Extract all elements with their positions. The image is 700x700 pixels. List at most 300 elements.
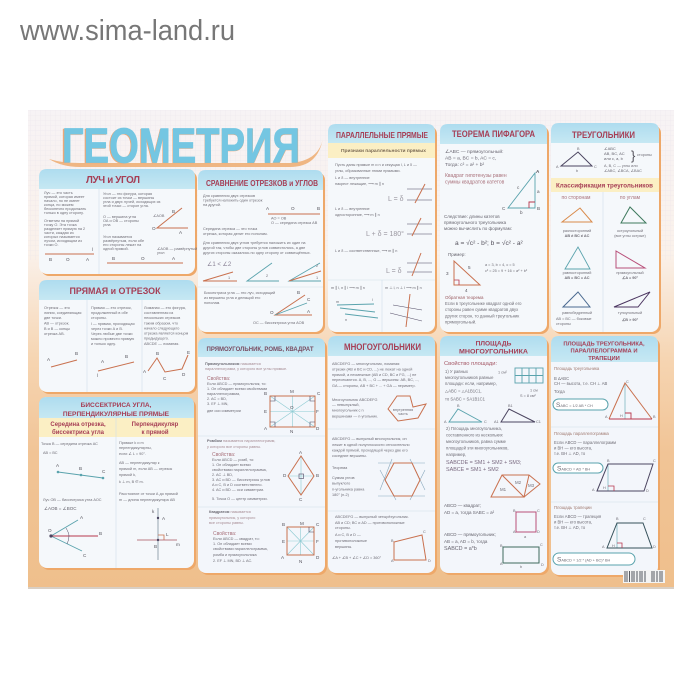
- diagram: straight angle: B: [112, 256, 115, 261]
- text: ray: [44, 191, 86, 247]
- diagrams: parallels: n: [345, 318, 347, 322]
- text: triangle area: В ∆ABC: [554, 376, 569, 381]
- diagrams: segment, line, polyline: B: [75, 351, 78, 356]
- text: bisector: [204, 291, 305, 325]
- diagrams: square and rectangle: D: [537, 530, 540, 534]
- text: example values: c² = 25 = 9 + 16 = a² + b²: [485, 269, 528, 273]
- text: perpendicular: если ∠ L = 90°.: [119, 452, 146, 456]
- text: square: 2. EF ⊥ MN, BD ⊥ AC.: [213, 559, 252, 563]
- text: segments: других стороны оказались по одну сторону от совмещённых.: [203, 251, 311, 255]
- text: segments: Середина отрезка — это точка: [203, 227, 258, 231]
- diagram: rectangle: M: [290, 389, 294, 394]
- heading: БИССЕКТРИСА УГЛА,: [81, 402, 152, 409]
- panel: line and segment: [39, 280, 197, 394]
- diagram: parallelogram: D: [646, 489, 649, 493]
- text: theorem: суммы квадратов катетов: [445, 180, 505, 186]
- text: example values: a = 3, b = 4, c = 5: [485, 263, 515, 267]
- diagram: segment AB: A: [266, 206, 270, 211]
- diagram: segment AB: B: [317, 206, 320, 211]
- text: ray: Отметим на прямой: [44, 219, 79, 223]
- text: columns: ABCDE — ломаная.: [144, 342, 179, 346]
- diagram: midpoint: [56, 463, 106, 479]
- panel: polygons: [328, 336, 437, 575]
- diagram: bisector: [270, 290, 312, 315]
- text: angle: О — вершина угла: [103, 215, 137, 219]
- text: triangle type labels: равнобедренный: [562, 311, 592, 315]
- diagram: perpendicular: k: [152, 509, 155, 514]
- text: midpoint: ∠AOB = ∠BOC: [44, 506, 77, 511]
- diagram: right triangle: b: [520, 210, 523, 215]
- text: rhombus: Ромбом называется параллелограмм,: [207, 439, 275, 443]
- text: notation: или c, a, b: [604, 156, 624, 161]
- diagram: trapezoid: A: [602, 545, 605, 549]
- diagrams: segment, line, polyline: D: [182, 372, 186, 377]
- text: square: [209, 510, 268, 563]
- text: triangle area: Тогда: [554, 389, 565, 394]
- diagram: hexagon: [378, 459, 425, 500]
- formula pill: trapezoid: SABCD = 1/2 * (AD + BC)* BH: [557, 556, 611, 564]
- title: ГЕОМЕТРИЯ: [62, 120, 300, 174]
- text: midpoint: Луч ОВ — биссектриса угла АОС: [43, 498, 102, 502]
- diagram: perpendicular: [137, 508, 180, 560]
- text: ray: Луч — это часть: [44, 191, 73, 195]
- diagram: bisector: C: [307, 297, 311, 302]
- diagrams: segment, line, polyline: E: [187, 350, 190, 355]
- diagrams: segment, line, polyline: [47, 350, 190, 381]
- text: definition: отрезки (AB и BC и CD, ...) не лежат на одной: [332, 368, 412, 372]
- text: square: свойствами параллелограмма,: [213, 547, 268, 551]
- diagram: quadrilateral: D: [428, 559, 431, 563]
- diagram: triangle height: [605, 380, 656, 419]
- text: segments: AO = OB: [271, 216, 287, 220]
- subheading: Признаки параллельности прямых: [341, 148, 426, 154]
- text: convex polygon: ABCDEFG — выпуклый многоугольник, он: [332, 437, 407, 441]
- heading: ПАРАЛЛЕЛОГРАММА И: [570, 348, 638, 354]
- text: convex polygon: Теорема: [332, 466, 348, 470]
- diagram: right triangle: C: [502, 206, 506, 211]
- diagram: bisector of angle: [48, 515, 102, 558]
- diagram: equal triangles: A: [444, 420, 447, 424]
- text: angle: одной прямой.: [103, 247, 129, 251]
- text: columns: предыдущего.: [144, 336, 169, 340]
- diagram: right triangle: a: [537, 189, 540, 194]
- heading: ПАРАЛЛЕЛЬНЫЕ ПРЯМЫЕ: [336, 130, 428, 140]
- heading: ЛУЧ и УГОЛ: [86, 175, 140, 186]
- text: triangle type labels: ∠B > 90°: [622, 317, 639, 322]
- diagram: example triangle: 5: [468, 265, 471, 270]
- diagram: angles: 2: [266, 274, 268, 278]
- diagram: angles: 1: [228, 276, 230, 280]
- text: ray: начало, но не имеет: [44, 199, 80, 203]
- text: notation: A, B, C — углы или: [604, 164, 638, 168]
- text: definition: — невыпуклый,: [332, 403, 360, 407]
- diagram: example triangle: [446, 261, 480, 293]
- diagram: bisector: O: [270, 310, 274, 315]
- text: segments: Для сравнения двух отрезков: [203, 194, 255, 198]
- text: square: Если ABCD — квадрат, то:: [213, 537, 260, 541]
- diagrams: square and rectangle: C: [540, 543, 543, 547]
- text: ray: бесконечно продолжать: [44, 207, 86, 211]
- text: definition: вершинами — n-угольник.: [332, 414, 378, 418]
- text: columns: стороны.: [91, 316, 107, 320]
- text: angle: Угол — это фигура, которая: [103, 192, 152, 196]
- text: columns: АВ — отрезок.: [44, 322, 69, 326]
- text: columns: [44, 306, 189, 346]
- panel: rectangle, rhombus, square: [198, 338, 327, 575]
- diagram: square: N: [299, 559, 302, 564]
- text: perpendicular: прямой m, если АВ — отрезок: [119, 467, 172, 471]
- diagrams: square and rectangle: D: [541, 563, 544, 567]
- subheadings: по углам: [620, 195, 641, 201]
- text: square: Квадратом называется: [209, 510, 251, 514]
- text: notation: [604, 146, 652, 173]
- formulas: [366, 196, 404, 275]
- panel: Pythagoras: [440, 124, 549, 334]
- diagram: straight angle: A: [172, 256, 176, 261]
- subheadings: Середина отрезка,: [50, 422, 106, 428]
- text: trapezoid area: т.е. BH ⊥ AD, то: [554, 525, 586, 530]
- text: segments: Для сравнения двух углов требуется наложить их один на: [203, 241, 306, 245]
- text: parallelogram area: и BH — его высота,: [554, 446, 592, 450]
- subheadings: [562, 195, 641, 201]
- text: triangle area: [554, 366, 608, 394]
- diagram: composite polygon: M2: [515, 480, 522, 485]
- text: corollary: прямоугольного треугольника: [444, 220, 507, 225]
- diagram: trapezoid: B: [616, 517, 619, 521]
- text: angle: Угол называется: [103, 235, 132, 239]
- diagram: trapezoid: H: [612, 544, 615, 548]
- diagram: equal triangles: B: [457, 404, 460, 408]
- heading: ТРЕУГОЛЬНИКИ: [572, 130, 635, 140]
- diagram: example triangle: 3: [446, 271, 449, 276]
- diagram: parallelogram: B: [607, 459, 610, 463]
- diagram: triangle height: C: [626, 380, 629, 384]
- diagram: unit grid: 1 см²: [498, 370, 508, 374]
- text: ray: которых называется: [44, 235, 80, 239]
- text: convex polygon: Сумма углов: [332, 476, 355, 480]
- text: rule two: 2) Площадь многоугольника,: [446, 426, 502, 431]
- subheadings: по сторонам: [562, 195, 591, 201]
- text: converse theorem: стороны равен сумме квадратов двух: [445, 307, 519, 312]
- diagram: quadrilateral: B: [391, 539, 394, 543]
- text: convex polygon: лежит в одной полуплоскости относительно: [332, 443, 410, 447]
- text: rule two: [446, 426, 522, 473]
- text: quadrilateral: ∠A + ∠B + ∠C + ∠D = 360°: [332, 556, 382, 560]
- text: corollary: можно вычислить по формулам:: [444, 226, 512, 231]
- text: convex polygon: выпуклого: [332, 482, 350, 486]
- text: square and rectangle area: AD = a, тогда SABC = a²: [444, 510, 495, 515]
- diagram: trapezoid: D: [653, 545, 656, 549]
- text: definition: ABCDEFG — многоугольник, ломаная:: [332, 362, 400, 366]
- diagram: bisector of angle: O: [48, 528, 52, 533]
- diagram: right triangle: A: [536, 169, 540, 174]
- text: definition: [332, 362, 419, 418]
- text: triangle area: CH — высота, т.е. CH ⊥ AB: [554, 381, 608, 386]
- text: triangle type labels: AB = BC — боковые: [556, 317, 592, 321]
- heading: ПЕРПЕНДИКУЛЯРНЫЕ ПРЯМЫЕ: [63, 411, 170, 418]
- text: corollary: Следствие: длины катетов: [444, 214, 500, 219]
- text: triangle type labels: ∠A = 90°: [622, 275, 639, 280]
- text: rectangle: 2. AC = BD,: [207, 397, 227, 401]
- text: example values: [485, 263, 528, 273]
- heading: СРАВНЕНИЕ ОТРЕЗКОВ и УГЛОВ: [206, 178, 318, 188]
- text: example: Пример:: [448, 252, 466, 257]
- diagram: line with point: A: [86, 257, 90, 262]
- text: rhombus: Свойства:: [212, 451, 235, 458]
- text: midpoint: АВ = ВС: [43, 451, 58, 455]
- diagram: rectangle: A: [264, 426, 268, 431]
- diagram: line with point: O: [66, 257, 70, 262]
- diagram: parallelogram: C: [653, 459, 656, 463]
- diagram: quadrilateral: C: [423, 530, 426, 534]
- panel: polygon area: [440, 336, 549, 575]
- text: square and rectangle area: AB = a, AD = b, тогда: [444, 539, 488, 544]
- formula pill: triangle: SABC = 1/2 AB * CH: [556, 402, 593, 409]
- text: bisector: Биссектриса угла — это луч, исходящий: [204, 291, 275, 295]
- text: triangle type labels: [556, 229, 646, 326]
- diagram: angle AOB: ∠AOB: [153, 214, 165, 218]
- text: rule one: [445, 369, 497, 402]
- diagram: equal triangles: [444, 404, 541, 424]
- diagram: angles: [203, 263, 321, 281]
- text: rhombus: A и C, B и D соответственно.: [212, 483, 263, 487]
- text: theorems: [331, 285, 422, 290]
- diagram: concave polygon: [388, 396, 426, 421]
- panel: ray and angle: [39, 169, 197, 276]
- title: ГЕОМЕТРИЯ: [60, 120, 300, 174]
- text: rule two: SABCE = SM1 + SM2: [446, 467, 499, 473]
- text: rhombus: 5. Точка O — центр симметрии.: [212, 497, 268, 501]
- text: rectangle: параллелограмма,: [207, 392, 240, 396]
- formula pill: parallelogram: SABCD = AD * BH: [557, 466, 590, 472]
- diagrams: parallels: m: [336, 300, 339, 304]
- text: columns: продолженный в обе: [91, 311, 128, 315]
- diagram: rectangle: E: [264, 409, 267, 414]
- diagram: rectangle: F: [316, 409, 319, 414]
- diagram: perpendicular: L: [166, 532, 169, 537]
- text: square and rectangle area: SABCD = a*b: [444, 546, 477, 552]
- text: convex polygon: каждой прямой, проходящей через две его: [332, 448, 408, 452]
- text: rule one: многоугольников равные: [445, 375, 494, 380]
- diagram: bisector: A: [307, 309, 311, 314]
- text: angle: этой точки — сторон угла.: [103, 204, 149, 208]
- text: segments: O — середина отрезка AB: [271, 221, 318, 225]
- diagram: equal triangles: B1: [508, 404, 513, 408]
- text: square and rectangle area: ABCD — квадрат;: [444, 503, 481, 508]
- diagram: trapezoid: C: [643, 517, 646, 521]
- text: converse theorem: других сторон, то данный треугольник: [445, 314, 519, 318]
- heading: ПРЯМАЯ и ОТРЕЗОК: [70, 285, 161, 296]
- text: columns: составленная из: [144, 311, 174, 315]
- text: columns: нескольких отрезков: [144, 316, 180, 320]
- text: rectangle: 3. EF ⊥ MN,: [207, 402, 228, 406]
- panel: parallel lines: [328, 124, 437, 334]
- text: perpendicular: m — длина перпендикуляра АВ: [119, 498, 175, 502]
- text: quadrilateral: A и C, B и D —: [335, 533, 361, 537]
- diagram: angle AOB: A: [179, 230, 183, 235]
- text: perpendicular: k ⊥ m, B ∈ m.: [119, 480, 144, 484]
- text: angle: ОА и ОВ — стороны: [103, 219, 139, 223]
- text: segments: другой так, чтобы две стороны углов совместились, а две: [203, 246, 305, 250]
- diagram: unit grid: [498, 368, 543, 398]
- diagram: angle AOB: [152, 208, 188, 235]
- text: rectangle: Прямоугольником называется: [205, 362, 261, 366]
- text: rectangle: параллелограмм, у которого все углы прямые.: [205, 367, 287, 371]
- text: columns: Отрезок — это: [44, 306, 70, 310]
- text: segments: требуется наложить один отрезок: [203, 198, 263, 202]
- text: rhombus: Если ABCD — ромб, то:: [212, 458, 254, 462]
- diagram: triangle height: B: [653, 415, 656, 419]
- text: perpendicular: перпендикулярны,: [119, 446, 152, 450]
- diagrams: segment, line, polyline: A: [47, 357, 51, 362]
- text: theorem: Квадрат гипотенузы равен: [445, 173, 507, 179]
- text: quadrilateral: противоположные: [335, 539, 367, 543]
- formulas: L = δ: [386, 268, 402, 275]
- text: definition: прямой, а несмежные (AB и CD, BC и FG, ...) не: [332, 373, 416, 377]
- text: rectangle: [205, 362, 287, 413]
- text: columns: линия, соединяющая: [44, 311, 81, 315]
- text: definition: пересекаются. A, B, ..., G — вершины: AB, BC, ...,: [332, 378, 419, 382]
- diagram: square: A: [281, 555, 285, 560]
- text: corollary: [444, 214, 512, 231]
- text: parallelogram area: Если ABCD — параллелограмм: [554, 440, 616, 445]
- text: rhombus: свойствами параллелограмма,: [212, 468, 267, 472]
- text: triangle type labels: разносторонний: [563, 229, 591, 233]
- text: convex polygon: 180° (n-2): [332, 493, 350, 497]
- diagram: line with point: B: [49, 257, 52, 262]
- diagrams: square and rectangle: A: [500, 562, 503, 566]
- diagrams: square and rectangle: [500, 509, 544, 569]
- diagram: parallelogram: A: [592, 488, 595, 492]
- text: notation: }: [631, 148, 636, 163]
- diagram: equal triangles: A1: [494, 420, 499, 424]
- text: rhombus: 1. Он обладает всеми: [212, 463, 251, 467]
- text: ray: точки О.: [44, 243, 59, 247]
- heading: [63, 402, 170, 418]
- text: triangle type labels: стороны: [556, 322, 571, 326]
- text: ray: прямой, которая имеет: [44, 195, 85, 199]
- poster background: [28, 110, 674, 589]
- subheading: Свойство площади:: [444, 360, 497, 367]
- text: triangle type labels: тупоугольный: [618, 311, 642, 315]
- diagram: composite polygon: M1: [500, 487, 507, 492]
- diagram: example triangle: 4: [465, 288, 468, 293]
- text: quadrilateral: ABCDEFG — выпуклый четырёхугольник.: [335, 515, 409, 519]
- text: columns: две точки.: [44, 316, 62, 320]
- text: square: 1. Он обладает всеми: [213, 542, 252, 546]
- text: triangle type labels: равносторонний: [563, 271, 591, 275]
- diagram: rhombus: [283, 450, 319, 502]
- text: square: Свойства:: [213, 530, 236, 537]
- text: convex polygon: соседние вершины.: [332, 454, 367, 458]
- text: columns: Ломаная — это фигура,: [144, 306, 186, 310]
- text: rectangle: Свойства:: [207, 375, 230, 382]
- site url: www.sima-land.ru: [19, 15, 235, 47]
- text: notation: AB, BC, AC: [604, 151, 625, 156]
- diagram: rectangle: B: [264, 391, 267, 396]
- text: parallelogram area: Площадь параллелограмма: [554, 431, 609, 436]
- diagram: parallelogram: [592, 459, 656, 493]
- diagram: quadrilateral: A: [391, 559, 394, 563]
- text: perpendicular: прямой k,: [119, 473, 136, 477]
- diagram: perpendicular: A: [162, 516, 166, 521]
- text: quadrilateral: [332, 515, 409, 560]
- diagram: right triangle: B: [537, 206, 540, 211]
- diagram: angles: 1: [316, 276, 318, 280]
- diagram: composite polygon: [491, 475, 540, 497]
- text: conditions: односторонние, ⟶ m ∥ n: [335, 212, 380, 217]
- diagram: line with point: [45, 247, 94, 262]
- text: rhombus: [207, 439, 275, 501]
- diagram: square: D: [316, 555, 320, 560]
- text: conditions: Пусть даны прямые m и n и секущая l, L и δ —: [335, 163, 417, 167]
- text: bisector: из вершины угла и делящий его: [204, 296, 260, 300]
- formula pill: trapezoid: [553, 553, 635, 565]
- text: angle: развёрнутым, если обе: [103, 239, 144, 243]
- diagrams: transversals: [407, 184, 432, 276]
- text: rule two: составленного из нескольких: [446, 432, 504, 438]
- text: angle: угла и двух лучей, исходящих из: [103, 200, 161, 204]
- text: triangle type labels: остроугольный: [617, 229, 643, 233]
- text: midpoint: Точка В — середина отрезка АС: [41, 442, 98, 446]
- diagram: triangle: C: [594, 165, 597, 169]
- diagram: angle AOB: B: [172, 209, 175, 214]
- text: columns: отрезка является концом: [144, 332, 189, 336]
- text: square: ромба и прямоугольника: [213, 553, 257, 557]
- text: theorem: ∠ABC — прямоугольный:: [445, 148, 503, 155]
- diagram: triangle: b: [576, 169, 578, 173]
- barcode: [623, 570, 665, 583]
- text: columns: Через любые две точки: [91, 332, 133, 336]
- diagram: triangle: B: [577, 147, 580, 151]
- text: rectangle: Если ABCD — прямоугольник, то:: [207, 382, 266, 386]
- text: rule two: многоугольников, равна сумме: [446, 439, 507, 444]
- diagram: composite polygon: M3: [528, 483, 535, 488]
- heading: [459, 340, 528, 356]
- panel: triangle, parallelogram, trapezoid area: [551, 336, 660, 577]
- text: triangle type labels: прямоугольный: [616, 271, 644, 275]
- text: columns: Прямая — это отрезок,: [91, 306, 132, 310]
- text: ray: точку О. Эта точка: [44, 223, 77, 227]
- diagrams: parallels: [336, 294, 422, 327]
- text: segments: отрезка, которая делит его пополам.: [203, 232, 268, 236]
- text: rule one: то SABC = SA1B1C1: [445, 396, 486, 402]
- diagram: concave polygon: часть: [398, 412, 408, 416]
- text: triangle type labels: (все углы острые): [614, 234, 646, 238]
- subheadings: Перпендикуляр: [132, 422, 179, 428]
- text: theorem: [445, 148, 507, 186]
- text: converse theorem: Если в треугольнике квадрат одной его: [445, 301, 522, 306]
- text: quadrilateral: AB и CD; BC и AD — противоположные: [335, 521, 405, 525]
- diagram: square: M: [300, 521, 304, 526]
- text: columns: через точки А и В.: [91, 327, 123, 331]
- text: notation: ∠ABC, ∠BCA, ∠BAC: [604, 169, 642, 173]
- text: angle: угол: [157, 251, 164, 255]
- diagram: rectangle: N: [290, 429, 293, 434]
- text: triangle type labels: AB = BC = AC: [565, 276, 590, 280]
- diagram: angle AOB: O: [152, 226, 156, 231]
- text: ray: разделяет прямую на 2: [44, 227, 85, 231]
- formula: a = √c² - b²; b = √c² - a²: [455, 239, 523, 247]
- text: rhombus: 3. AC и BD — биссектрисы углов: [212, 478, 270, 482]
- diagram: parallelogram: H: [603, 486, 606, 490]
- diagram: unit grid: S = 8 см²: [520, 394, 537, 398]
- text: rule two: SABCDE = SM1 + SM2 + SM3;: [446, 460, 522, 466]
- diagrams: square and rectangle: a: [524, 535, 527, 539]
- text: rule two: например,: [446, 452, 466, 457]
- text: definition: Многоугольник ABCDEFG: [332, 398, 377, 402]
- heading: МНОГОУГОЛЬНИКА: [459, 348, 528, 356]
